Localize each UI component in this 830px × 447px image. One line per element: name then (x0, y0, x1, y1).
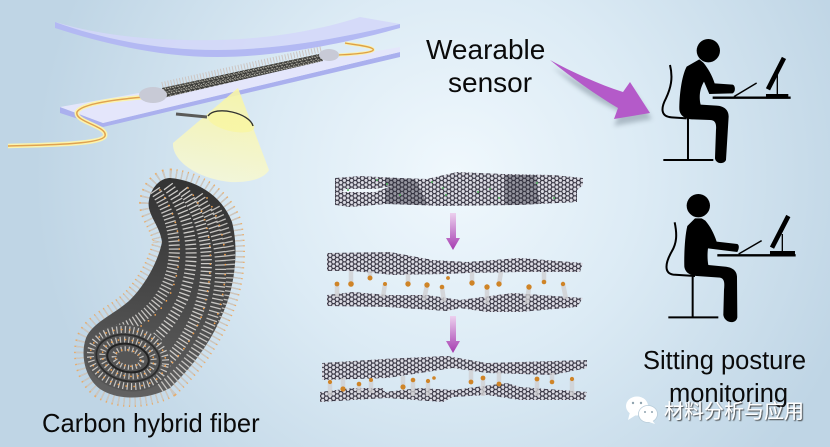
light cone (173, 88, 269, 182)
fiber body (84, 178, 235, 398)
label: Wearable sensor (426, 34, 545, 98)
chair (663, 65, 713, 160)
fiber hairs (162, 49, 322, 85)
light cone and magnifier (173, 88, 269, 182)
illustration: carbon hybrid fiber (79, 178, 235, 399)
label: Sitting posture monitoring: monitoring (669, 380, 788, 408)
label: Sitting posture monitoring: Sitting posture (643, 347, 806, 375)
upper curved film edge (55, 22, 400, 57)
chair (666, 222, 718, 317)
left electrode (139, 87, 167, 103)
icon: seated person at laptop, top (663, 39, 791, 163)
arrow: stage 2 to 3 (446, 316, 460, 353)
desk, laptop, monitor (713, 94, 791, 101)
watermark: 材料分析与应用 (664, 400, 804, 423)
graphene stage 1 (335, 172, 583, 207)
lens rim (208, 111, 253, 126)
spiral end of fiber (79, 317, 177, 399)
label: Sitting posture monitoring (643, 347, 806, 408)
graphene stage 3 (320, 356, 587, 402)
right wire (338, 43, 373, 55)
lower film edge (60, 52, 400, 127)
lower film surface (60, 47, 400, 123)
pillars (330, 370, 572, 396)
label: Wearable sensor: Wearable (426, 34, 545, 65)
big purple arrow (550, 60, 652, 126)
nanoparticles (335, 276, 565, 290)
inner hairs (118, 186, 231, 388)
illustration: flexible sensor device (8, 17, 400, 146)
label: Wearable sensor: sensor (448, 67, 532, 98)
carbon fiber on film (162, 53, 323, 98)
icon: seated person at laptop, bottom (666, 194, 796, 322)
graphene stage 2 (327, 252, 583, 312)
arrow: stage 1 to 2 (446, 213, 460, 250)
upper curved film top face (55, 17, 400, 50)
icon: chat bubbles (626, 396, 658, 424)
desk, laptop, monitor (717, 252, 796, 259)
outer gray hairs (84, 178, 235, 398)
pillars (337, 271, 566, 304)
right electrode (319, 49, 339, 61)
outer orange tips (84, 178, 235, 398)
left wire (8, 97, 145, 146)
lens (206, 107, 256, 137)
handle (176, 114, 207, 117)
label: Carbon hybrid fiber: Carbon hybrid fiber (42, 410, 260, 438)
nanoparticles (328, 376, 574, 392)
